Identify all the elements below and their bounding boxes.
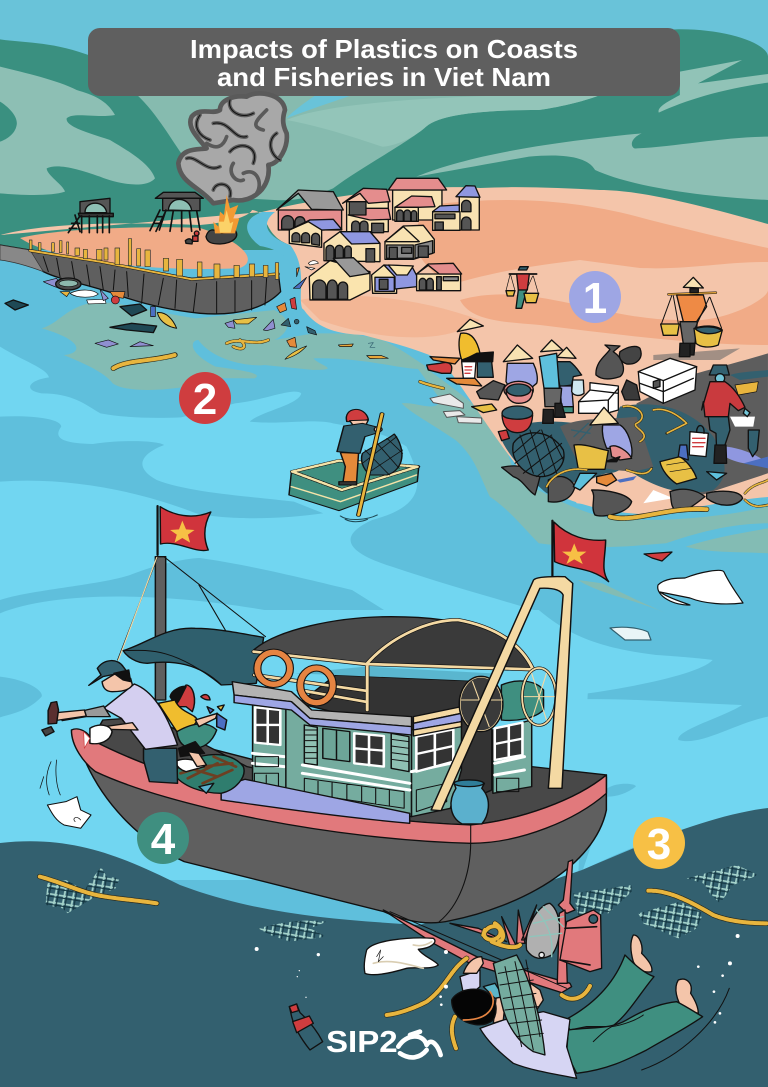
fire [206,195,239,244]
scene: trash shore and workers [420,267,768,518]
coracle with man [289,409,419,522]
ground debris patches [500,348,768,505]
fish caught in net [526,903,563,958]
house: red roof right [417,263,462,291]
house: purple roof cream [324,232,380,262]
water jar [451,780,488,824]
number badge 1 [569,271,621,323]
number badge 2 [179,372,231,424]
cabin front [253,703,532,817]
crouching fisherman [158,685,227,772]
stern flag [158,506,211,555]
sand: village shore and pier peninsula [0,187,768,514]
cabin windows [255,707,522,772]
scene: pier, fire and village [0,93,480,368]
number badge 2: 2 [193,375,217,424]
logo [326,1025,441,1059]
nets drifting [258,865,758,942]
rope right [648,891,767,923]
lifebuoys [257,652,333,703]
river [247,212,304,315]
title banner: Impacts of Plastics on Coasts [190,34,578,64]
winch and spools [460,668,556,731]
title banner [88,28,680,96]
mast and stays [118,557,266,700]
number badge 3 [633,817,685,869]
person: woman with basin [498,345,537,441]
title banner: and Fisheries in Viet Nam [217,62,551,92]
house: tall red roof [388,178,447,221]
house: grey roof pink wall [277,190,343,230]
person at fire [185,231,199,244]
rudder post and bars [383,860,602,993]
bow flag [552,521,609,582]
person: red sweater with bucket [689,365,759,463]
yellow ropes on shore [420,382,768,518]
number badge 4: 4 [151,815,176,864]
bubbles [255,934,740,1024]
darker wave band [0,558,400,620]
fishing boat [40,506,609,923]
house: cream grey walls [385,225,434,259]
fishing net bag [513,430,564,477]
house: tower purple [433,186,480,230]
debris beside seated worker [427,357,505,400]
rope and net left [40,867,156,913]
hills [0,29,768,250]
falling plastic bag [40,760,91,828]
house: cream with red roof [343,188,391,233]
shore trash by pier [5,261,388,368]
number badge 3: 3 [647,820,671,869]
pier wall [0,239,281,314]
yellow bag and scraps [573,445,727,490]
cabin roof band [232,682,461,736]
logo: SIP2 [326,1025,398,1059]
drowning person [452,935,729,1078]
deep water [0,808,768,1087]
underwater scene [255,860,767,1078]
sea upper [0,302,768,610]
fisherman dropping trash [42,661,178,783]
person: crouching with yellow basket [572,407,632,469]
plastic bottle [289,1004,323,1050]
garbage bags [502,345,743,516]
person: two standing workers [539,340,584,423]
A-frame gantry [431,577,573,811]
purple deck step [221,779,410,823]
awning [123,628,264,685]
village houses [277,178,480,300]
stilt huts [68,192,203,233]
plastic bag under boat [364,938,438,975]
person: seated yellow shirt [457,319,493,378]
sea lower [0,580,768,880]
house: purple roof arches [289,219,342,247]
smoke plume [178,93,287,203]
house: purple wall small [372,265,417,293]
roof canopy [254,617,532,710]
house: large cream arches grey roof [309,258,370,300]
rope knot [387,923,590,1048]
person: small carrier [506,267,539,308]
number badge 1: 1 [583,274,607,323]
person: carrier with baskets [661,277,722,357]
net patch top right [735,382,758,395]
number badge 4 [137,812,189,864]
fish catch pile [173,755,244,793]
styrofoam boxes [430,358,697,423]
cabin back dark wall [299,675,492,808]
plastic bag and debris, right sea [610,552,743,640]
hull [71,717,606,923]
